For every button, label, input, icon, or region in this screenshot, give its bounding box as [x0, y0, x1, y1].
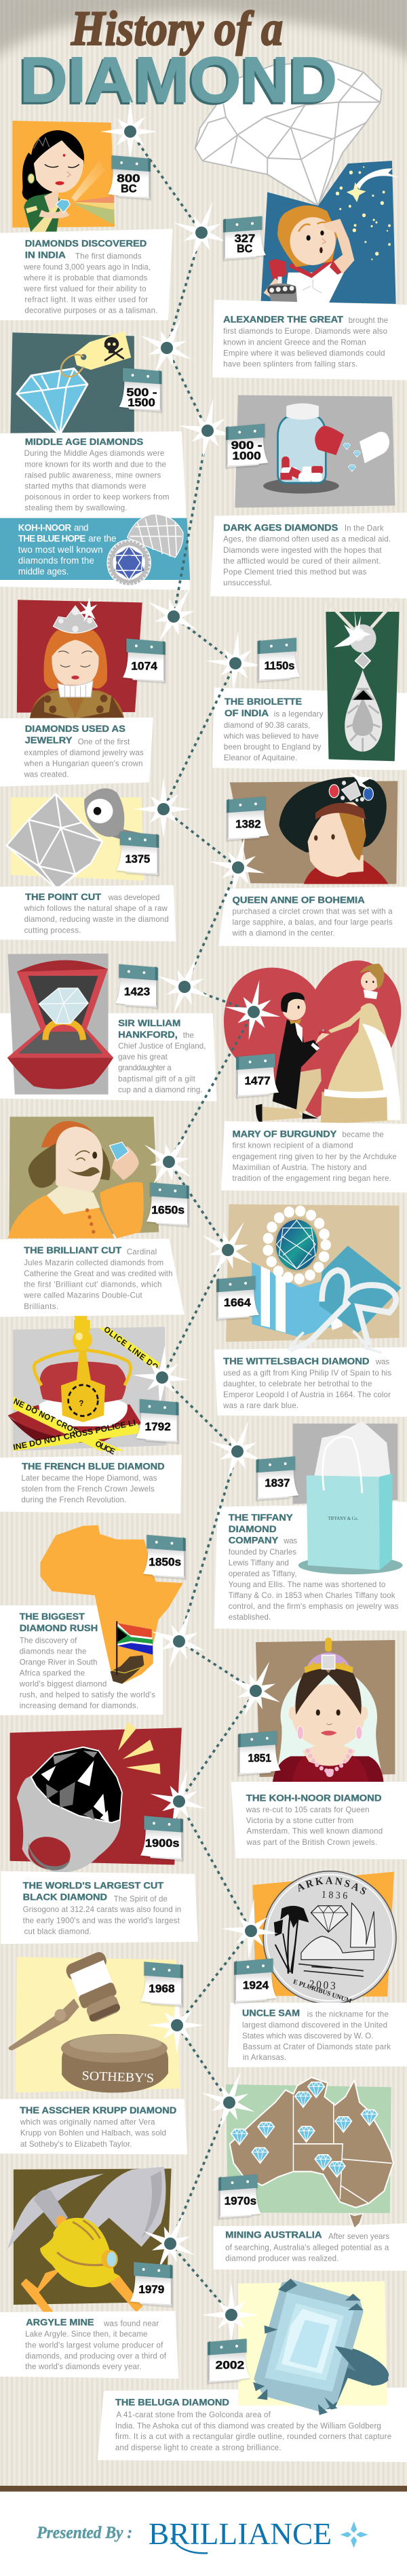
- text card: Lewis Tiffany and: [229, 1559, 289, 1567]
- text card: largest diamond discovered in the United: [242, 2020, 387, 2030]
- text card: stolen from the French Crown Jewels: [21, 1485, 155, 1494]
- text card: Queen Anne of Bohemia: with a diamond in the center.: [232, 929, 335, 938]
- text card: Cardinal: [127, 1247, 157, 1257]
- text card: Dark Ages diamonds: the afflicted would be cured of their ailment.: [223, 557, 381, 566]
- illustration: Tiffany shopping bag: TIFFANY & Co.: [328, 1517, 358, 1521]
- text block: rush, and helped to satisfy the world's: [20, 1691, 155, 1700]
- text card: diamonds, and producing over a third of: [25, 2351, 167, 2360]
- text card: cut black diamond.: [24, 1926, 92, 1936]
- calendar: 1650s: 1650s: [151, 1204, 185, 1217]
- calendar: 1150s: 1150s: [265, 659, 294, 672]
- text card: the Wittelsbach diamond: [214, 1331, 407, 1417]
- text card: the world's diamonds every year.: [25, 2362, 142, 2371]
- text card: during the French Revolution.: [21, 1496, 126, 1504]
- text card: BLACK DIAMOND: [23, 1892, 107, 1902]
- text card: Jules Mazarin collected diamonds from: [24, 1258, 163, 1268]
- footer: Brilliance logo: BRILLIANCE: [149, 2517, 332, 2551]
- icon: sparkle: [340, 2521, 368, 2548]
- icon: loupe: [84, 788, 148, 844]
- calendar: 1837: [256, 1456, 298, 1501]
- text card: was re-cut to 105 carats for Queen: [246, 1805, 370, 1814]
- illustration: ring in a red box: [7, 954, 113, 1095]
- calendar: 327 BC: BC: [237, 243, 253, 255]
- panel: diamonds used as jewelry: [0, 598, 153, 787]
- illustration: Alexander under starry sky: [261, 161, 398, 308]
- text card: India. The Ashoka cut of this diamond was created by the William Goldberg: [115, 2421, 381, 2430]
- illustration: Queen Victoria: [256, 1638, 395, 1782]
- icons: diamond mine markers: [231, 2082, 378, 2177]
- text card: the early 1900's and was the world's largest: [23, 1915, 180, 1926]
- text card: which was originally named after Vera: [20, 2117, 155, 2126]
- text card: [0, 1013, 217, 1101]
- illustration: Arkansas quarter coin: 1836: [322, 1889, 348, 1902]
- text card: where it is probable that diamonds: [23, 273, 147, 283]
- calendar: 1423: 1423: [124, 985, 150, 998]
- text card: MIDDLE AGE DIAMONDS: [25, 437, 143, 447]
- timeline: dotted path: [130, 132, 256, 2315]
- calendar: 1664: [216, 1276, 259, 1321]
- calendar: 1837: 1837: [265, 1477, 290, 1489]
- text card: Maximilian of Austria. The history and: [233, 1163, 366, 1172]
- panel: the French Blue diamond: [0, 1316, 182, 1514]
- text card: cup and a diamond ring.: [118, 1085, 203, 1094]
- text card: Young and Ellis. The name was shortened to: [229, 1580, 386, 1589]
- section 5: [0, 1637, 407, 2256]
- text card: have been splinters from falling stars.: [223, 359, 357, 368]
- section 1: [0, 121, 407, 508]
- text card: Krupp von Bohlen und Halbach, was sold: [20, 2128, 166, 2138]
- text card: gave his great: [118, 1053, 168, 1061]
- text card: in Arkansas.: [243, 2052, 286, 2062]
- calendar: 1924: 1924: [243, 1979, 269, 1991]
- text card: HANKFORD,: [118, 1030, 178, 1040]
- illustration: crown behind police tape: [7, 1316, 166, 1457]
- text card: the point cut: [0, 885, 176, 941]
- text card: Dark Ages diamonds: [210, 513, 407, 598]
- text card: Queen Anne of Bohemia: [218, 886, 407, 948]
- panel: Queen Anne of Bohemia illustration: [230, 772, 398, 884]
- text card: the Wittelsbach diamond: used as a gift from King Philip IV of Spain to his: [223, 1369, 391, 1378]
- text card: ARGYLE MINE: [26, 2317, 94, 2328]
- date calendars: upper section: [108, 155, 269, 469]
- text card: [0, 431, 190, 590]
- text card: decorative purposes or as a talisman.: [24, 306, 157, 315]
- icon: brooch with pearls: [268, 1211, 326, 1279]
- calendar: 1851: [238, 1731, 281, 1776]
- calendar: 1924: [234, 1958, 277, 2004]
- panel: middle age diamonds text and callout: [0, 431, 190, 590]
- calendar: 1970s: [218, 2174, 261, 2220]
- illustration: pick, shovel and hard hat: [7, 2167, 172, 2313]
- illustration: crown behind police tape: ?: [79, 1399, 83, 1408]
- callout: Koh-i-Noor and Blue Hope: and: [74, 522, 89, 533]
- text card: Tiffany & Co. in 1853 when Charles Tiffany took: [229, 1591, 395, 1600]
- calendar: 1851: 1851: [248, 1752, 271, 1765]
- calendar: 1792: [136, 1399, 178, 1444]
- calendar: 1650s: [147, 1182, 189, 1228]
- text card: the Wittelsbach diamond: THE WITTELSBACH DIAMOND: [223, 1356, 370, 1366]
- illustration: map of Africa with South African flag: [40, 1525, 183, 1684]
- callout: Koh-i-Noor and Blue Hope: THE BLUE HOPE: [18, 533, 85, 544]
- illustration: Sotheby's gavel: [9, 1950, 180, 2092]
- illustration: Hungarian queen: [17, 598, 142, 718]
- text card: [0, 229, 172, 320]
- text card: at Sotheby's to Elizabeth Taylor.: [20, 2139, 132, 2149]
- text card: founded by Charles: [229, 1548, 296, 1557]
- title: History of a: History of a: [71, 1, 283, 56]
- text card: Lake Argyle. Since then, it became: [25, 2329, 148, 2339]
- panel: the Brilliant cut: [0, 1117, 185, 1316]
- text card: the point cut: cutting process.: [24, 926, 81, 935]
- text card: Grisogono at 312.24 carats was also found in: [23, 1905, 181, 1914]
- text block: increasing demand for diamonds.: [20, 1701, 138, 1710]
- calendar: 2002: [208, 2339, 250, 2384]
- text card: the Wittelsbach diamond: daughter, to celebrate her betrothal to the: [223, 1380, 372, 1388]
- text card: UNCLE SAM: [242, 2008, 300, 2018]
- calendar: 900-1000: 900 -: [231, 440, 263, 452]
- text card: examples of diamond jewelry was: [24, 748, 144, 757]
- icon: Blue Hope diamond: [107, 540, 151, 585]
- text card: tradition of the engagement ring began here.: [233, 1174, 391, 1183]
- panel: diamonds discovered in India: [0, 121, 172, 320]
- illustration: Cardinal Mazarin: [7, 1117, 159, 1238]
- text card: was found near: [103, 2318, 159, 2328]
- callout: Koh-i-Noor and Blue Hope: two most well known: [18, 545, 103, 555]
- panel: the Beluga diamond: [98, 2278, 407, 2462]
- text card: [214, 1501, 407, 1631]
- panel: the Wittelsbach diamond illustration: [226, 1205, 401, 1349]
- text card: THE FRENCH BLUE DIAMOND: [22, 1461, 165, 1472]
- text card: mining Australia: MINING AUSTRALIA: [225, 2229, 322, 2240]
- text card: were called Mazarins Double-Cut: [23, 1291, 142, 1300]
- calendar: 500-1500: 1500: [128, 397, 155, 409]
- text card: [0, 1239, 185, 1316]
- illustration: black diamond ring: [10, 1721, 182, 1873]
- text card: Queen Anne of Bohemia: QUEEN ANNE OF BOHEMIA: [233, 895, 365, 905]
- illustration: Arkansas quarter coin: 2003: [309, 1978, 336, 1992]
- text block: Africa sparked the: [20, 1668, 85, 1678]
- calendar: 1850s: 1850s: [149, 1556, 181, 1569]
- text card: Catherine the Great and was credited with: [24, 1269, 172, 1279]
- text card: the world's largest volume producer of: [25, 2340, 163, 2350]
- text card: which was believed to have: [223, 732, 319, 741]
- text card: [0, 1455, 182, 1514]
- calendar: 1968: 1968: [149, 1983, 175, 1995]
- timeline: star markers: [100, 99, 294, 2343]
- text card: the point cut: THE POINT CUT: [25, 892, 101, 902]
- text card: control, and the firm's emphasis on jewelry was: [229, 1602, 399, 1611]
- text card: Queen Anne of Bohemia: large sapphire, a balas, and four large pearls: [233, 918, 393, 927]
- text card: became the: [342, 1130, 384, 1139]
- text card: first known recipient of a diamond: [233, 1141, 353, 1150]
- text block: THE BIGGEST: [20, 1612, 85, 1622]
- text card: [0, 1605, 163, 1715]
- text card: poisonous in order to keep workers from: [24, 492, 170, 502]
- calendar: 1074: [123, 638, 166, 684]
- calendar: 900-1000: 1000: [233, 450, 261, 463]
- text card: firm. It is a cut with a rectangular girdle outline, rounded corners that capture: [115, 2432, 392, 2441]
- calendar: 1900s: [140, 1816, 183, 1862]
- text card: established.: [229, 1613, 271, 1622]
- text card: were first valued for their ability to: [23, 284, 147, 294]
- icon: blue diamond: [17, 368, 88, 435]
- icon: Koh-i-Noor diamond: [128, 514, 183, 558]
- callout: Koh-i-Noor and Blue Hope: are the: [88, 533, 117, 544]
- text card: A 41-carat stone from the Golconda area of: [116, 2410, 271, 2419]
- text card: diamond of 90.38 carats,: [224, 721, 310, 730]
- text card: [98, 2387, 407, 2462]
- text card: was: [283, 1536, 297, 1546]
- illustration: crown behind police tape: NE DO NOT CROS: [12, 1397, 79, 1436]
- text card: known in ancient Greece and the Roman: [223, 338, 366, 347]
- panel: mining Australia illustration: [226, 2077, 393, 2228]
- text card: was created.: [24, 770, 69, 779]
- panel: middle age diamonds illustration with poison tag: [10, 331, 134, 435]
- map of Australia: [230, 2077, 393, 2208]
- text card: COMPANY: [229, 1535, 278, 1546]
- illustration: Arkansas quarter coin: [252, 1871, 397, 2006]
- text card: DIAMONDS DISCOVERED: [25, 238, 147, 249]
- text card: Brilliants.: [24, 1302, 58, 1311]
- callout: Koh-i-Noor and Blue Hope: [0, 514, 190, 585]
- calendar: 1792: 1792: [145, 1421, 171, 1433]
- text block: DIAMOND RUSH: [20, 1623, 98, 1633]
- text card: ALEXANDER THE GREAT: [223, 314, 343, 325]
- text card: MARY OF BURGUNDY: [233, 1129, 336, 1139]
- calendar: 1074: 1074: [131, 660, 157, 673]
- panel: the Briolette of India: [212, 598, 407, 770]
- text card: baptismal gift of a gilt: [118, 1074, 195, 1083]
- icon: gift box: [252, 1246, 401, 1349]
- text card: operated as Tiffany,: [229, 1569, 296, 1578]
- text card: the Wittelsbach diamond: was: [375, 1358, 389, 1367]
- text card: DIAMONDS USED AS: [25, 724, 125, 734]
- panel: Mary of Burgundy: [221, 960, 407, 1192]
- text card: the: [183, 1031, 194, 1040]
- text card: [231, 1782, 407, 1859]
- calendar: 1970s: 1970s: [225, 2195, 256, 2208]
- panel: Uncle Sam: [228, 1871, 407, 2067]
- illustration: heart: [224, 960, 401, 1118]
- text card: [0, 2099, 187, 2154]
- text card: THE ASSCHER KRUPP DIAMOND: [20, 2105, 177, 2115]
- illustration: emerald cut ring: [238, 2278, 389, 2415]
- text card: Victoria by a stone cutter from: [246, 1815, 353, 1825]
- text card: engagement ring given to her by the Archduke: [233, 1152, 397, 1161]
- text card: Bassum at Crater of Diamonds state park: [243, 2042, 391, 2051]
- text card: THE BRIOLETTE: [225, 697, 302, 707]
- text block: The discovery of: [20, 1636, 77, 1645]
- text card: the point cut: which follows the natural shape of a raw: [24, 904, 168, 913]
- illustration: Sotheby's gavel: SOTHEBY'S: [81, 2069, 154, 2085]
- illustration: crown behind police tape: OLICE LINE DO: [102, 1325, 159, 1372]
- calendar: 1979: [130, 2262, 172, 2307]
- text card: IN INDIA: [25, 250, 66, 260]
- panel: the biggest diamond rush: [0, 1525, 183, 1715]
- text card: mining Australia: of searching, Australia's alleged potential as a: [225, 2242, 389, 2252]
- text card: One of the first: [78, 737, 130, 746]
- calendar: 1968: [140, 1962, 183, 2008]
- illustration: Indian woman with diamond: [12, 121, 115, 232]
- text card: Empire where it was believed diamonds could: [223, 349, 385, 357]
- text card: were found 3,000 years ago in India,: [23, 262, 151, 271]
- text card: Eleanor of Aquitaine.: [224, 754, 297, 762]
- text card: was part of the British Crown jewels.: [246, 1837, 377, 1847]
- text card: started myths that diamonds were: [24, 482, 147, 490]
- footer: presented by: Presented By :: [36, 2523, 132, 2542]
- calendar: 1150s: [258, 638, 300, 682]
- text card: JEWELRY: [25, 735, 73, 745]
- text card: DIAMOND: [229, 1524, 277, 1534]
- text card: the Wittelsbach diamond: was a rare dark blue.: [222, 1401, 298, 1410]
- calendar: 1900s: 1900s: [145, 1837, 179, 1850]
- illustration: Arkansas quarter coin: E PLURIBUS UNUM: [292, 1978, 352, 2006]
- text block: world's biggest diamond: [19, 1679, 106, 1689]
- icon: poison tag with skull: [61, 331, 131, 376]
- text card: Dark Ages diamonds: Ages, the diamond often used as a medical aid.: [223, 535, 391, 544]
- text block: diamonds near the: [20, 1647, 87, 1656]
- calendar: 1850s: [143, 1535, 186, 1580]
- calendar: 1375: [116, 832, 159, 876]
- calendar: 327 BC: 327: [235, 233, 255, 245]
- text card: States which was discovered by W. O.: [242, 2031, 373, 2040]
- callout: Koh-i-Noor and Blue Hope: diamonds from the: [18, 555, 94, 566]
- text card: The first diamonds: [75, 252, 142, 260]
- text card: Dark Ages diamonds: unsuccessful.: [223, 579, 272, 587]
- text card: Dark Ages diamonds: Diamonds were ingested with the hopes that: [223, 546, 382, 555]
- icons: small falling diamonds: [343, 443, 360, 471]
- panel: point cut illustration: [7, 788, 148, 889]
- text card: Dark Ages diamonds: DARK AGES DIAMONDS: [223, 522, 338, 533]
- text card: granddaughter a: [118, 1063, 172, 1072]
- panel: the Tiffany Diamond Company: [214, 1421, 407, 1631]
- text card: mining Australia: diamond producer was realized.: [225, 2253, 338, 2263]
- icon: raw diamond: [7, 794, 102, 889]
- text card: [0, 2311, 178, 2379]
- text card: brought the: [349, 316, 389, 325]
- text card: the point cut: was developed: [108, 893, 159, 902]
- illustration: crown behind police tape: OLICE: [94, 1439, 117, 1457]
- text card: [221, 1121, 407, 1192]
- text card: OF INDIA: [225, 708, 269, 718]
- text card: THE WORLD'S LARGEST CUT: [23, 1880, 164, 1891]
- calendar: 1423: [115, 964, 158, 1009]
- panel: the Koh-i-Noor diamond: [231, 1638, 407, 1859]
- illustration: kneeling suitor: [256, 992, 330, 1123]
- calendar: 1375: 1375: [125, 853, 150, 865]
- calendar: 1664: 1664: [224, 1297, 251, 1309]
- illustration: crown behind police tape: INE DO NOT CROSS POLICE LI: [12, 1418, 136, 1452]
- text card: when a Hungarian queen's crown: [24, 759, 142, 768]
- calendar: 800 BC: [108, 155, 151, 200]
- panel: the world's largest cut black diamond: [1, 1721, 198, 1944]
- text card: Amsterdam. This well known diamond: [247, 1826, 383, 1836]
- calendar: 500-1500: 500 -: [126, 386, 157, 399]
- text card: is a legendary: [274, 709, 324, 719]
- text card: [0, 718, 153, 787]
- text card: Later became the Hope Diamond, was: [21, 1474, 157, 1483]
- text card: The Spirit of de: [114, 1894, 168, 1904]
- text card: THE BELUGA DIAMOND: [115, 2397, 229, 2408]
- calendar: 800 BC: 800: [117, 172, 140, 184]
- text card: more known for its worth and due to the: [24, 460, 166, 469]
- calendar: 1979: 1979: [138, 2284, 164, 2296]
- text card: the first 'Brilliant cut' diamonds, which: [24, 1280, 161, 1289]
- text card: is the nickname for the: [307, 2009, 389, 2019]
- section 2: [0, 431, 407, 889]
- text card: raised public awareness, mine owners: [24, 471, 161, 480]
- calendar: 800 BC: BC: [121, 182, 137, 195]
- section 3: [0, 885, 407, 1349]
- calendar: 2002: 2002: [216, 2359, 244, 2372]
- text card: stealing them by swallowing.: [24, 503, 128, 513]
- text card: been brought to England by: [224, 743, 322, 752]
- callout: Koh-i-Noor and Blue Hope: KOH-I-NOOR: [18, 522, 71, 533]
- illustration: Briolette pendant: [324, 598, 400, 761]
- calendar: 327 BC: [223, 216, 266, 261]
- illustration: Tiffany shopping bag: [298, 1421, 403, 1574]
- calendar: 1477: [236, 1053, 279, 1099]
- panel: dark ages illustration with pill jar: [235, 395, 395, 508]
- Tasmania: [349, 2214, 363, 2228]
- text card: [228, 2003, 407, 2067]
- text block: Orange River in South: [20, 1658, 98, 1667]
- calendar: 900-1000: [226, 424, 269, 469]
- section 6: [0, 2167, 407, 2576]
- text card: THE TIFFANY: [229, 1513, 293, 1523]
- text card: During the Middle Ages diamonds were: [24, 449, 165, 458]
- callout: Koh-i-Noor and Blue Hope: middle ages.: [18, 566, 69, 577]
- text card: [1, 1871, 198, 1944]
- panel: the Asscher Krupp diamond: [0, 1950, 187, 2154]
- title: DIAMOND: DIAMOND: [20, 44, 337, 116]
- calendar: 1382: [227, 796, 269, 842]
- text card: SIR WILLIAM: [118, 1018, 180, 1028]
- text block: [19, 1612, 155, 1710]
- text card: mining Australia: After seven years: [328, 2231, 389, 2241]
- calendar: 1477: 1477: [245, 1075, 271, 1087]
- text card: Chief Justice of England,: [118, 1042, 206, 1051]
- text card: Dark Ages diamonds: Pope Clement tried this method but was: [223, 568, 366, 577]
- panel: Alexander the Great: [212, 161, 407, 380]
- panel: Argyle mine: [0, 2167, 178, 2379]
- illustration: Mary in gown: [321, 964, 400, 1125]
- text card: Queen Anne of Bohemia: purchased a circlet crown that was set with a: [233, 907, 393, 916]
- text card: [212, 688, 407, 770]
- big diamond outline behind title: [195, 60, 382, 206]
- footer: brown rule and white band: [0, 2486, 407, 2576]
- section 4: [0, 1316, 407, 1715]
- text card: [212, 300, 407, 380]
- text card: and disperse light to create a strong brilliance.: [115, 2442, 281, 2453]
- text card: THE BRILLIANT CUT: [24, 1245, 121, 1255]
- text card: Dark Ages diamonds: In the Dark: [345, 524, 384, 533]
- text card: first diamonds to Europe. Diamonds were also: [223, 327, 387, 336]
- text card: mining Australia: [214, 2214, 407, 2271]
- text card: refract light. It was either used for: [24, 295, 148, 305]
- calendar: 1382: 1382: [235, 818, 261, 831]
- text card: the point cut: diamond, reducing waste in the diamond: [24, 915, 169, 924]
- calendar: 500-1500: [119, 368, 161, 413]
- panel: Sir William Hankford: [0, 954, 217, 1101]
- text card: the Wittelsbach diamond: Emperor Leopold I of Austria in 1664. The color: [223, 1390, 391, 1399]
- text card: THE KOH-I-NOOR DIAMOND: [246, 1793, 382, 1803]
- illustration: Arkansas quarter coin: ARKANSAS: [298, 1877, 366, 1894]
